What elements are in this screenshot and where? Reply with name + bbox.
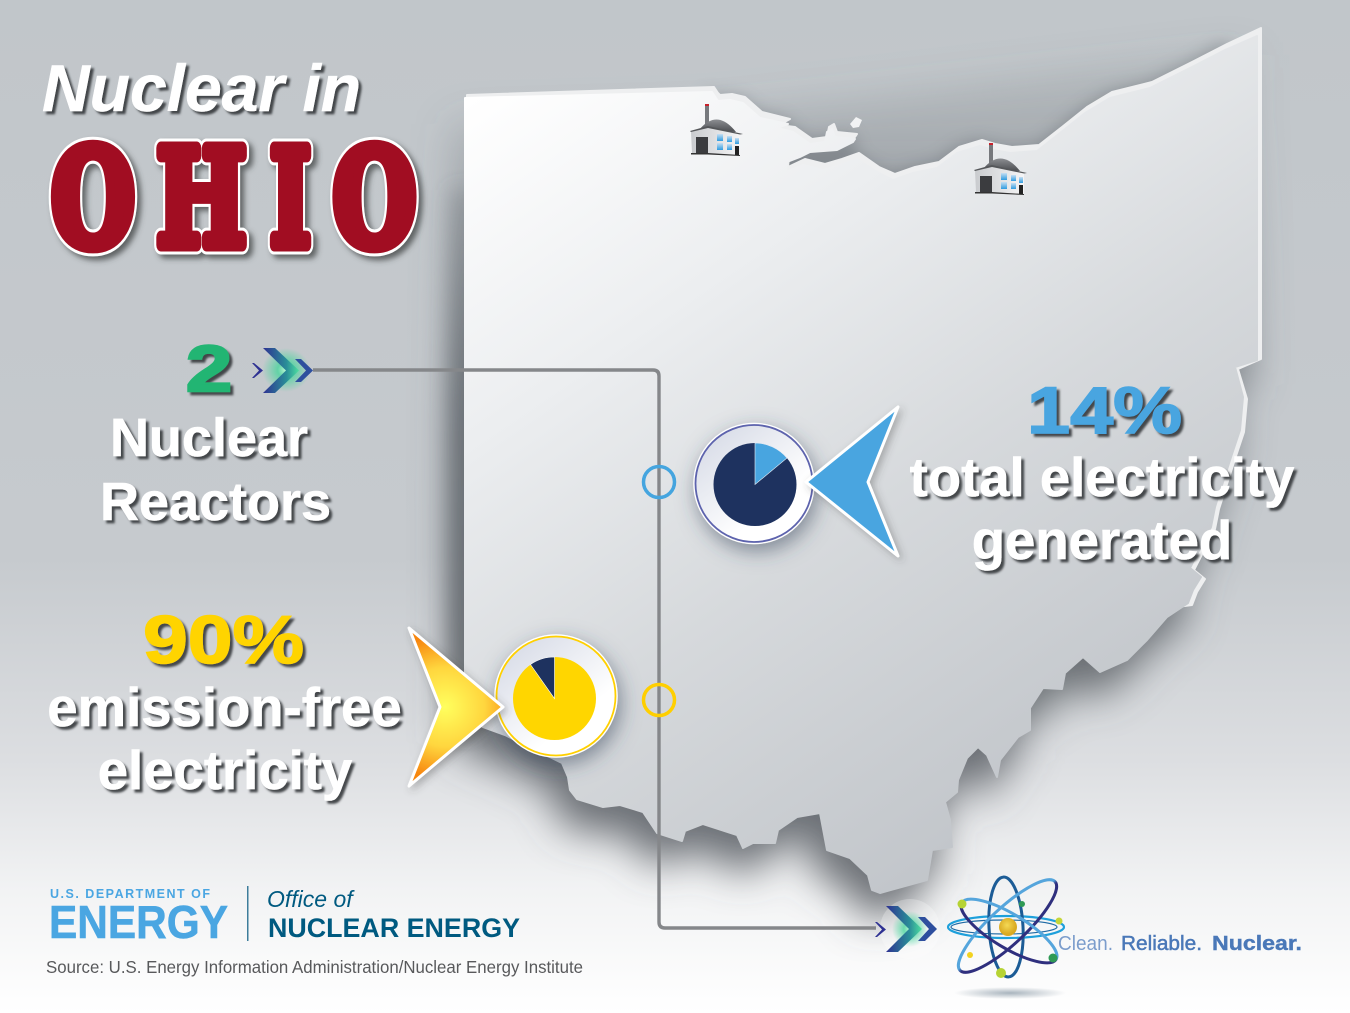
tagline: Clean. [1058, 932, 1113, 955]
tagline: Nuclear. [1212, 932, 1302, 955]
letter fill [52, 121, 416, 277]
letter fill: H [156, 121, 246, 277]
title: OHIO [52, 121, 416, 277]
logo: U.S. Department of Energy: ENERGY [49, 896, 228, 948]
pie chart: 90% [495, 635, 617, 757]
source: Source: U.S. Energy Information Administration/Nuclear Energy Institute [46, 957, 583, 977]
tagline [1058, 932, 1302, 955]
map shadow [451, 42, 1249, 919]
island [850, 117, 862, 128]
icon: power plant east [974, 143, 1027, 195]
chevrons [252, 348, 313, 393]
connector line [313, 370, 876, 928]
map of Ohio [465, 28, 1261, 893]
stat: 2 nuclear reactors: Reactors [100, 472, 331, 532]
icon: power plant west [690, 104, 743, 156]
stat: 2 nuclear reactors [100, 332, 331, 532]
orbits [948, 916, 1064, 938]
percentage: 14% [1027, 373, 1182, 447]
atom shadow [954, 987, 1066, 999]
number 2: 2 [186, 332, 232, 405]
letter outlines: I [270, 121, 311, 277]
tagline: Reliable. [1121, 932, 1202, 955]
label: total electricity [910, 447, 1295, 508]
chevrons: bottom [875, 899, 940, 959]
ring marker yellow [644, 684, 674, 716]
letter outlines: O [52, 121, 134, 277]
map edge highlight [467, 28, 1261, 697]
logo: Office of Nuclear Energy: Office of [267, 886, 355, 912]
stat: 90% emission-free electricity [47, 602, 402, 801]
letter outlines: H [156, 121, 246, 277]
percentage: 90% [143, 602, 304, 678]
logo: atom [948, 869, 1067, 999]
letter outlines [52, 121, 416, 277]
land [465, 36, 1257, 893]
nucleus [999, 918, 1017, 936]
pie chart: 14% [694, 424, 814, 544]
arrow: yellow [409, 628, 503, 786]
electrons [958, 900, 966, 908]
logo: Office of Nuclear Energy [247, 886, 520, 943]
label: Nuclear [110, 408, 308, 468]
ring marker blue [644, 466, 674, 498]
letter fill: I [270, 121, 311, 277]
label: emission-free [47, 677, 402, 738]
stat: 90% emission-free electricity: electricity [98, 740, 353, 801]
letter fill: O [52, 121, 134, 277]
letter outlines: O [333, 121, 416, 277]
logo: Office of Nuclear Energy: NUCLEAR ENERGY [268, 913, 520, 943]
stat: 14% total electricity generated: generated [972, 510, 1232, 571]
title: Nuclear in: Nuclear in [42, 51, 361, 125]
letter fill: O [333, 121, 416, 277]
logo: U.S. Department of Energy: U.S. DEPARTMENT OF [50, 887, 210, 901]
stat: 14% total electricity generated [910, 373, 1295, 571]
arrow: blue [806, 407, 898, 556]
